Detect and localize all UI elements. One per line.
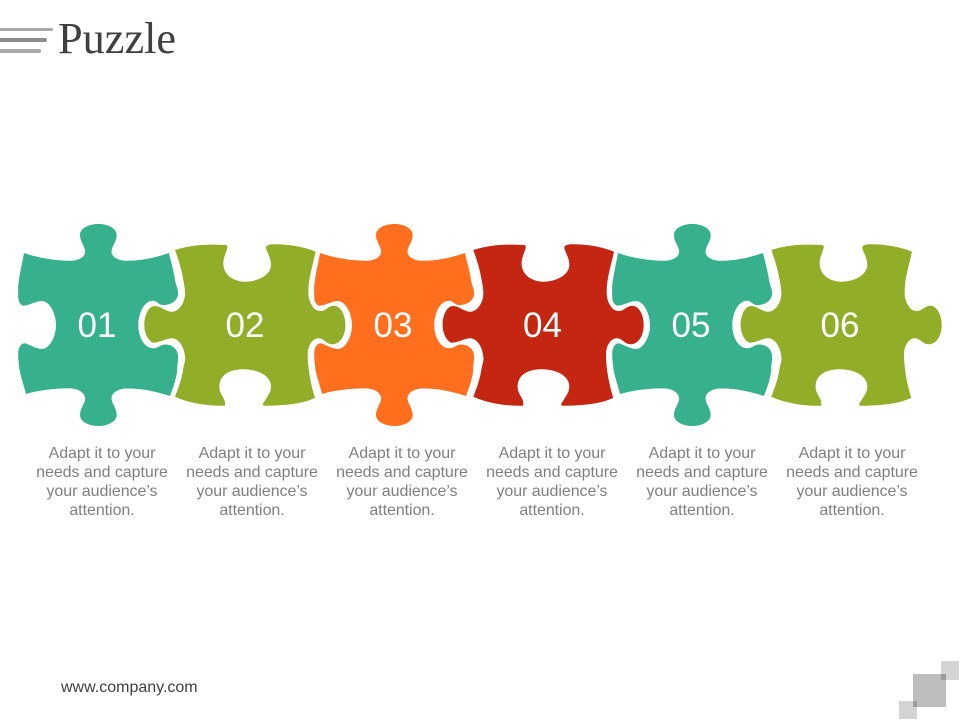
caption 02: needs and capture	[186, 464, 318, 481]
caption 01: Adapt it to your	[49, 445, 155, 462]
caption 03: your audience’s	[346, 483, 458, 500]
caption 06: Adapt it to your	[799, 445, 905, 462]
icon: corner squares	[899, 661, 959, 719]
caption 03	[336, 445, 468, 519]
number 03: 03	[374, 306, 412, 345]
caption 02: your audience’s	[196, 483, 308, 500]
number 06: 06	[821, 306, 859, 345]
puzzle piece 03	[314, 224, 474, 426]
caption 01: attention.	[69, 502, 135, 519]
caption 01: your audience’s	[46, 483, 158, 500]
caption 04: attention.	[519, 502, 585, 519]
caption 04: needs and capture	[486, 464, 618, 481]
caption 01: needs and capture	[36, 464, 168, 481]
number 01: 01	[78, 306, 116, 345]
puzzle piece 06	[741, 244, 942, 406]
title: Puzzle	[58, 14, 176, 63]
caption 03: attention.	[369, 502, 435, 519]
caption 02	[186, 445, 318, 519]
icon: title lines	[0, 28, 53, 53]
caption 03: Adapt it to your	[349, 445, 455, 462]
caption 04: Adapt it to your	[499, 445, 605, 462]
caption 05: attention.	[669, 502, 735, 519]
caption 01	[36, 445, 168, 519]
puzzle piece 04	[443, 244, 644, 406]
caption 05: your audience’s	[646, 483, 758, 500]
puzzle piece 01	[18, 224, 178, 426]
puzzle piece 05	[612, 224, 772, 426]
caption 04: your audience’s	[496, 483, 608, 500]
number 02: 02	[226, 306, 264, 345]
caption 06: needs and capture	[786, 464, 918, 481]
caption 05	[636, 445, 768, 519]
puzzle piece 02	[144, 244, 345, 406]
caption 03: needs and capture	[336, 464, 468, 481]
footer url: www.company.com	[61, 679, 198, 696]
caption 04	[486, 445, 618, 519]
caption 06	[786, 445, 918, 519]
caption 05: needs and capture	[636, 464, 768, 481]
caption 02: attention.	[219, 502, 285, 519]
caption 02: Adapt it to your	[199, 445, 305, 462]
caption 06: your audience’s	[796, 483, 908, 500]
caption 05: Adapt it to your	[649, 445, 755, 462]
number 05: 05	[672, 306, 710, 345]
number 04: 04	[523, 306, 562, 345]
caption 06: attention.	[819, 502, 885, 519]
